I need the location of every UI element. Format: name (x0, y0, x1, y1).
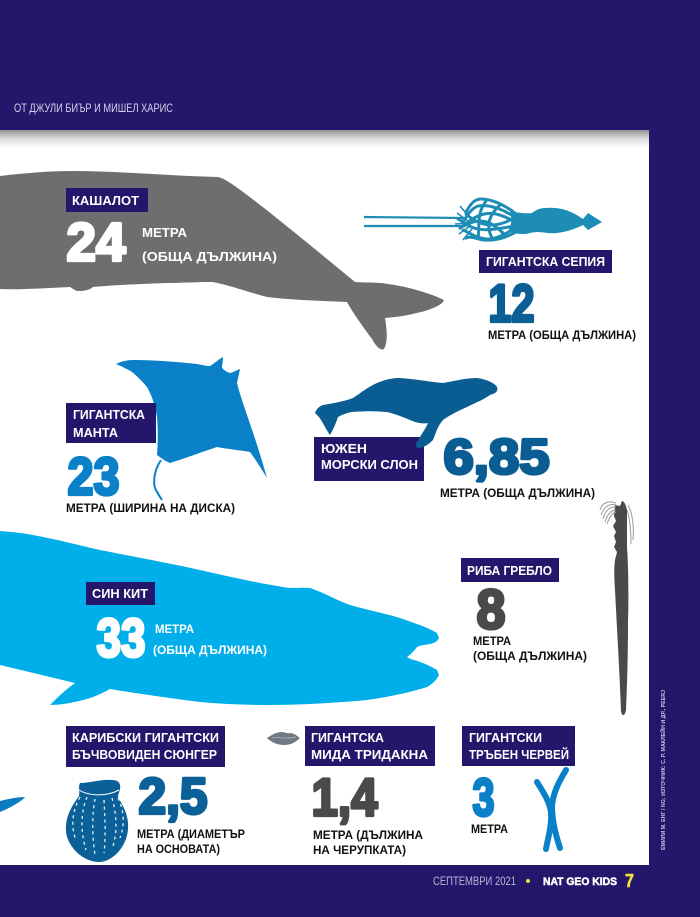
caption: sperm whale: (ОБЩА ДЪЛЖИНА) (142, 249, 277, 264)
caption: elephant seal: МЕТРА (ОБЩА ДЪЛЖИНА) (440, 486, 595, 500)
number: 3 metres: 3 (472, 768, 494, 828)
label: giant clam: МИДА ТРИДАКНА (311, 747, 429, 762)
panel: giant manta (66, 357, 267, 515)
label: oarfish: РИБА ГРЕБЛО (467, 563, 552, 578)
number: 1,4 metres: 1,4 (312, 768, 378, 828)
footer: issue date and page number (433, 871, 634, 891)
label: barrel sponge: КАРИБСКИ ГИГАНТСКИ (72, 730, 219, 745)
number: 12 metres: 12 (488, 274, 534, 334)
panel: giant tube worm (462, 726, 575, 849)
caption: giant manta: МЕТРА (ШИРИНА НА ДИСКА) (66, 501, 235, 515)
label: giant manta: МАНТА (73, 425, 119, 440)
panel: giant squid (364, 199, 636, 342)
number: 8 metres: 8 (476, 578, 506, 640)
label: sperm whale: КАШАЛОТ (72, 193, 139, 208)
caption: oarfish: (ОБЩА ДЪЛЖИНА) (473, 649, 587, 663)
label: giant manta (66, 403, 156, 443)
panel: southern elephant seal (314, 378, 595, 500)
panel: blue whale (0, 531, 439, 705)
byline: ОТ ДЖУЛИ БИЪР И МИШЕЛ ХАРИС (14, 103, 173, 115)
label: oarfish (461, 558, 559, 582)
label: elephant seal (314, 437, 424, 481)
caption: barrel sponge: МЕТРА (ДИАМЕТЪР (137, 827, 245, 841)
label: giant squid: ГИГАНТСКА СЕПИЯ (486, 254, 605, 269)
silhouette: elephant seal (315, 378, 497, 448)
label: giant clam (305, 726, 435, 766)
caption: blue whale: МЕТРА (155, 622, 194, 636)
caption: giant tube worm: МЕТРА (471, 822, 508, 836)
silhouette: sperm whale (0, 171, 444, 349)
caption: oarfish (473, 634, 587, 663)
caption: barrel sponge (137, 827, 245, 856)
footer: issue date and page number: NAT GEO KIDS (543, 876, 617, 888)
silhouette: oarfish (600, 501, 633, 715)
label: elephant seal: ЮЖЕН (321, 441, 367, 456)
footer: issue date and page number: 7 (625, 871, 634, 891)
label: giant squid (479, 250, 612, 273)
number: 33 metres: 33 (96, 608, 146, 668)
caption: blue whale: (ОБЩА ДЪЛЖИНА) (153, 643, 267, 657)
white content panel (0, 130, 649, 865)
footer: issue date and page number: СЕПТЕМВРИ 2021 (433, 876, 516, 888)
caption: oarfish: МЕТРА (473, 634, 511, 648)
fragment: whale tail at left edge (0, 797, 25, 812)
label: blue whale: СИН КИТ (92, 586, 148, 601)
label: giant clam: ГИГАНТСКА (311, 730, 385, 745)
silhouette: giant squid (364, 199, 602, 240)
panel: sperm whale (0, 171, 444, 349)
silhouette: giant manta (116, 357, 267, 500)
label: barrel sponge (66, 726, 225, 767)
caption: giant clam (313, 828, 423, 857)
caption: blue whale (153, 622, 267, 657)
label: giant manta: ГИГАНТСКА (73, 407, 146, 422)
icon: giant tube worm (537, 770, 566, 849)
silhouette: barrel sponge (66, 780, 128, 862)
icon: giant clam (267, 732, 300, 745)
label: barrel sponge: БЪЧВОВИДЕН СЮНГЕР (72, 747, 217, 762)
photo credit: ЕМИЛИ М. ЕНГ / NG; ИЗТОЧНИК: С. Р. МАКЛЕЙН И ДР., PEERJ (659, 690, 667, 850)
caption: giant clam: МЕТРА (ДЪЛЖИНА (313, 828, 423, 842)
caption: giant clam: НА ЧЕРУПКАТА) (313, 843, 406, 857)
label: elephant seal: МОРСКИ СЛОН (321, 457, 418, 472)
label: blue whale (86, 582, 155, 605)
label: giant tube worm: ГИГАНТСКИ (469, 730, 542, 745)
number: 6,85 metres: 6,85 (444, 430, 550, 484)
panel: barrel sponge (66, 726, 245, 862)
label: giant tube worm: ТРЪБЕН ЧЕРВЕЙ (469, 747, 569, 762)
panel: giant clam (267, 726, 435, 857)
number: 23 metres: 23 (68, 448, 120, 506)
label: giant tube worm (462, 726, 575, 766)
label: sperm whale (66, 188, 148, 212)
caption: giant squid: МЕТРА (ОБЩА ДЪЛЖИНА) (488, 328, 636, 342)
panel: oarfish (461, 501, 633, 715)
caption: sperm whale (142, 225, 277, 264)
caption: sperm whale: МЕТРА (142, 225, 188, 240)
silhouette: blue whale (0, 531, 439, 705)
number: 24 metres: 24 (66, 212, 126, 272)
caption: barrel sponge: НА ОСНОВАТА) (137, 842, 220, 856)
number: 2,5 metres: 2,5 (138, 768, 208, 824)
